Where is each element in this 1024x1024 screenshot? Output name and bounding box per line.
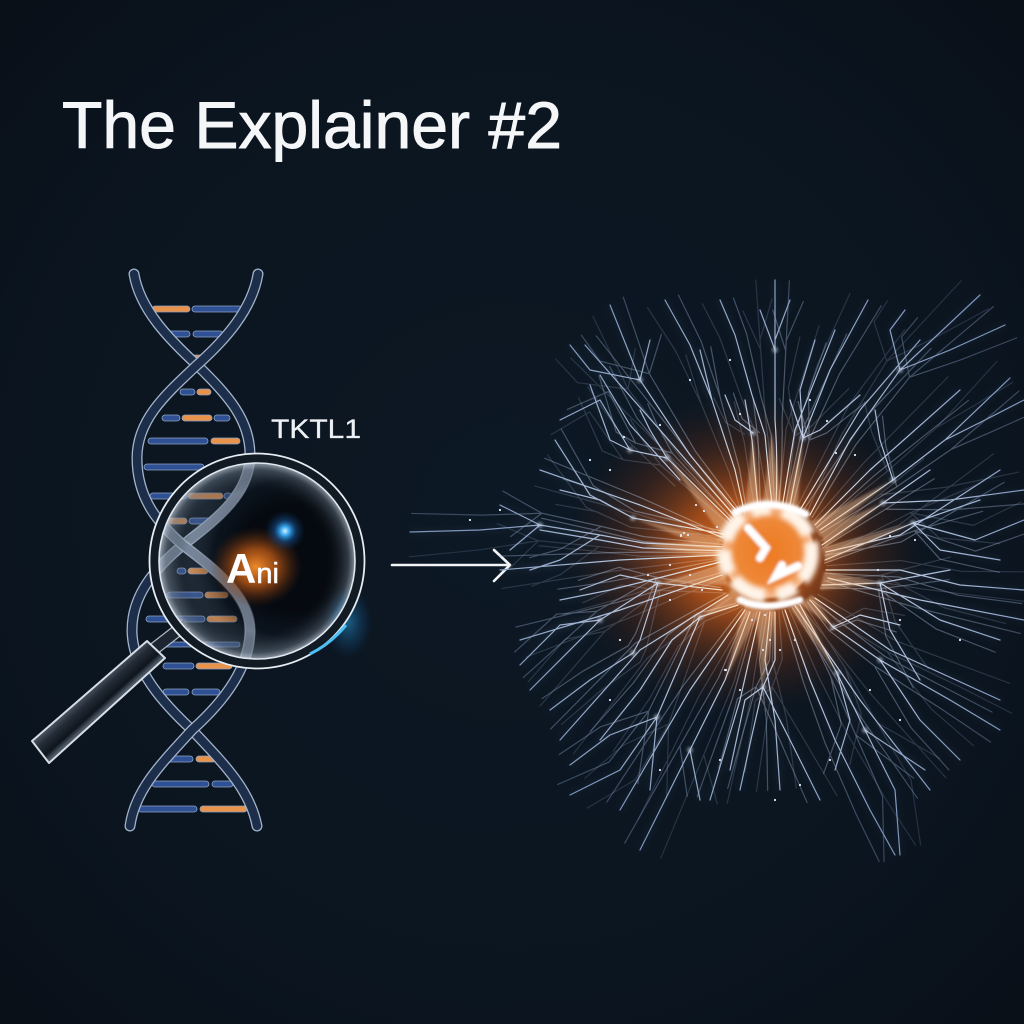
orange glow (565, 395, 925, 715)
dendrite junction webs (540, 350, 913, 750)
helix strand two (130, 274, 258, 826)
orange glow behind label (210, 527, 302, 607)
lens ring (150, 454, 364, 668)
helix strand one (132, 274, 257, 826)
lens glass (160, 464, 354, 658)
floating particles (470, 360, 960, 800)
dendrite haze (410, 280, 1024, 855)
magnifying glass (31, 452, 369, 764)
dendrite branches (410, 280, 1024, 855)
dendrite parallel fibres (392, 262, 1024, 879)
magnifier handle (32, 624, 186, 763)
neuron cell body (722, 504, 814, 606)
blue light spot (265, 511, 305, 551)
lens label: Ani: Ani (226, 545, 279, 592)
neuron (392, 262, 1024, 879)
title: The Explainer #2 (62, 88, 562, 162)
dendrite trunks (633, 433, 913, 687)
label: TKTL1: TKTL1 (271, 414, 361, 444)
arrow (392, 550, 510, 581)
DNA double helix (130, 274, 258, 826)
blue rim glow (324, 586, 372, 658)
base pair rungs (138, 306, 247, 812)
